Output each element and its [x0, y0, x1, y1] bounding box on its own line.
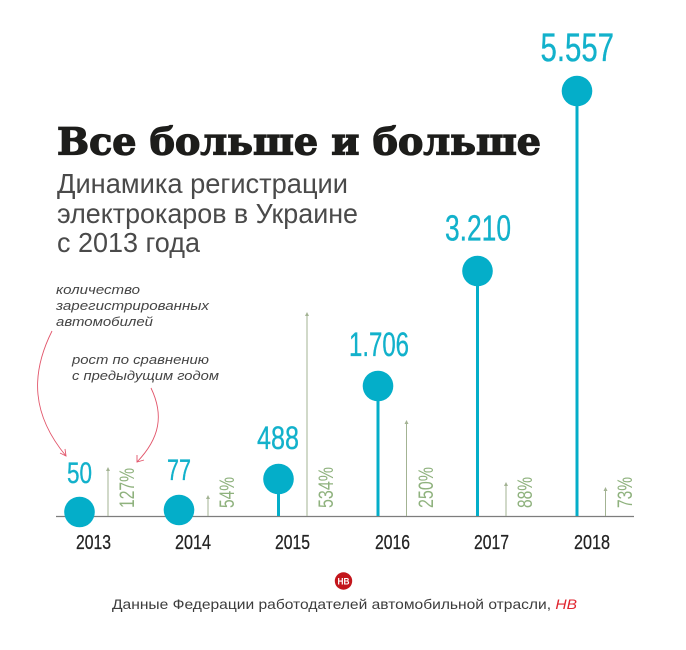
source: Данные Федерации работодателей автомобильной отрасли, НВ [112, 596, 577, 612]
growth arrow 2017 [504, 477, 537, 516]
growth arrow 2013: 127% [116, 468, 139, 508]
2013 column [64, 457, 111, 554]
growth arrow 2014 [206, 477, 239, 516]
2017 column [445, 208, 511, 554]
2018 column: 2018 [574, 532, 610, 554]
growth arrow 2015: 534% [315, 467, 338, 508]
arrow: growth [137, 388, 158, 462]
2014 column: 77 [167, 454, 191, 487]
2017 column: 3.210 [445, 208, 511, 248]
growth arrow 2014: 54% [216, 477, 239, 508]
subtitle: Динамика регистрации [57, 168, 348, 199]
annotation: registered cars: автомобилей [56, 314, 153, 329]
2018 column [540, 26, 614, 554]
annotation: growth: с предыдущим годом [72, 368, 219, 383]
growth arrow 2017: 88% [514, 477, 537, 508]
annotation: growth: рост по сравнению [71, 352, 209, 367]
arrow: registered cars [38, 331, 66, 456]
growth arrow 2018: 73% [614, 477, 637, 508]
growth arrow 2015 [305, 312, 338, 516]
2016 column [349, 326, 410, 554]
2018 column: 5.557 [540, 26, 614, 70]
subtitle: с 2013 года [57, 227, 201, 258]
growth arrow 2018 [604, 477, 637, 516]
growth arrow 2016: 250% [415, 467, 438, 508]
2014 column [164, 454, 211, 554]
subtitle: электрокаров в Украине [57, 198, 358, 229]
2016 column: 2016 [375, 532, 410, 554]
annotation: growth [71, 352, 219, 383]
icon: NV logo [335, 572, 352, 590]
title: Все больше и больше [57, 120, 541, 164]
2013 column: 2013 [76, 532, 111, 554]
annotation: registered cars: зарегистрированных [55, 298, 210, 313]
annotation: registered cars: количество [56, 282, 140, 297]
2016 column: 1.706 [349, 326, 409, 364]
subtitle [57, 168, 358, 258]
growth arrow 2016 [404, 420, 438, 516]
icon: NV logo: НВ [338, 576, 350, 588]
axis [56, 516, 634, 518]
2013 column: 50 [67, 457, 92, 490]
2015 column: 2015 [275, 532, 310, 554]
growth arrow 2013 [106, 467, 139, 516]
2017 column: 2017 [474, 532, 509, 554]
2014 column: 2014 [175, 532, 211, 554]
2015 column [257, 420, 310, 554]
2015 column: 488 [257, 420, 299, 456]
annotation: registered cars [55, 282, 210, 329]
